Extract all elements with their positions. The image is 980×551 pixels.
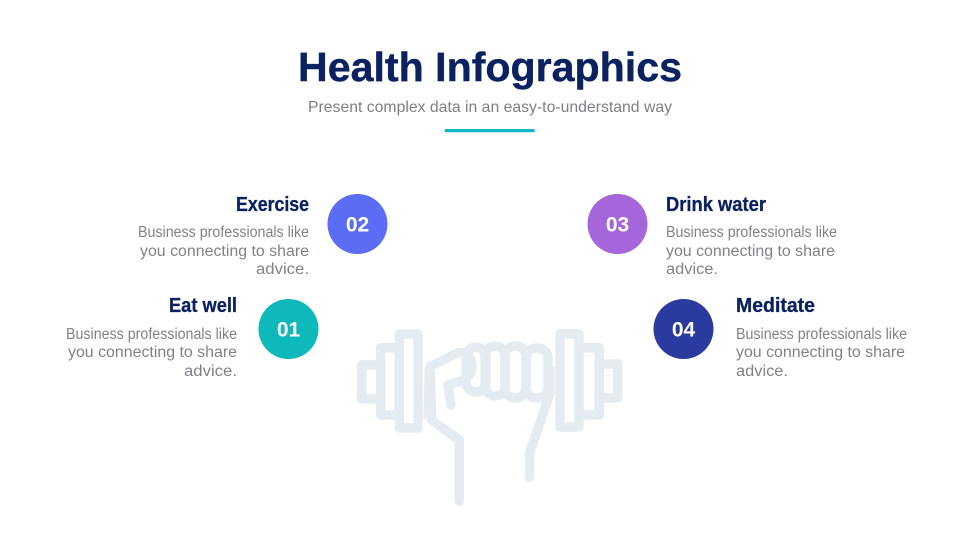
description: eat well: you connecting to share xyxy=(68,344,237,361)
heading: drink water: Drink water xyxy=(666,194,766,216)
badge 01: 01 xyxy=(277,318,300,342)
description: meditate: you connecting to share xyxy=(736,344,905,361)
description: drink water: you connecting to share xyxy=(666,243,835,260)
badge 03: 03 xyxy=(606,214,629,236)
badge 04: 04 xyxy=(672,318,695,342)
title: Health Infographics xyxy=(298,44,682,90)
title underline xyxy=(445,129,534,132)
description: exercise xyxy=(138,224,309,278)
heading: exercise: Exercise xyxy=(236,194,309,216)
item 01: eat well xyxy=(66,295,318,380)
badge 03 xyxy=(588,194,648,254)
description: eat well: advice. xyxy=(184,363,237,380)
description: meditate: Business professionals like xyxy=(736,326,907,343)
icon: fist lifting dumbbell xyxy=(362,334,618,501)
description: exercise: Business professionals like xyxy=(138,224,309,241)
description: meditate: advice. xyxy=(736,363,788,380)
badge 04 xyxy=(654,299,714,359)
description: drink water: advice. xyxy=(666,261,718,278)
description: eat well: Business professionals like xyxy=(66,326,237,343)
badge 01 xyxy=(258,299,318,359)
description: meditate xyxy=(736,326,907,380)
subtitle: Present complex data in an easy-to-understand way xyxy=(308,99,672,116)
item 04: meditate xyxy=(654,295,907,380)
heading: eat well: Eat well xyxy=(169,295,237,317)
description: drink water: Business professionals like xyxy=(666,224,837,241)
description: eat well xyxy=(66,326,237,380)
description: exercise: advice. xyxy=(256,261,309,278)
heading: meditate: Meditate xyxy=(736,295,815,317)
description: drink water xyxy=(666,224,837,278)
item 03: drink water xyxy=(588,194,837,278)
item 02: exercise xyxy=(138,194,388,278)
description: exercise: you connecting to share xyxy=(140,243,309,260)
badge 02 xyxy=(328,194,388,254)
badge 02: 02 xyxy=(346,214,369,236)
